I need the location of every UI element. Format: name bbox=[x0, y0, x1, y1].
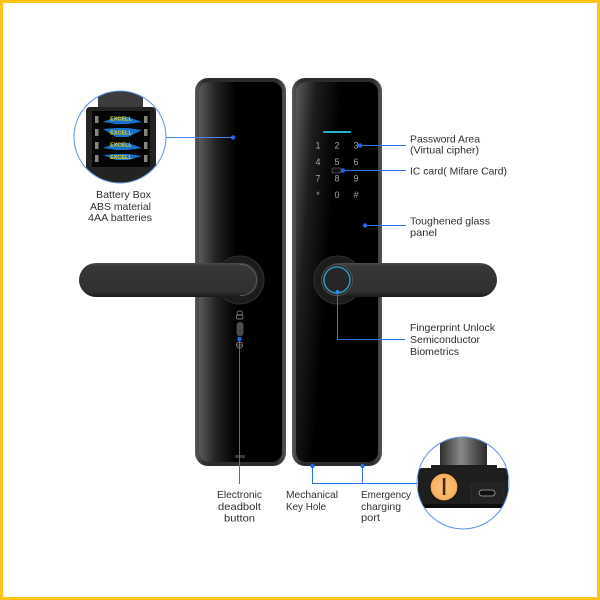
label: fingerprint bbox=[410, 322, 496, 358]
battery 1: EXCELL bbox=[110, 116, 132, 122]
callout line: IC card bbox=[341, 168, 406, 173]
right lock panel bbox=[292, 78, 382, 466]
label: deadbolt: button bbox=[224, 512, 255, 524]
callout line: toughened glass bbox=[363, 223, 406, 228]
fingerprint ring bbox=[324, 267, 350, 293]
keypad: 1 bbox=[315, 140, 321, 150]
label: deadbolt: Electronic bbox=[217, 489, 262, 501]
label: password area bbox=[410, 134, 480, 156]
keypad: * bbox=[316, 190, 320, 200]
keypad: # bbox=[353, 190, 359, 200]
label: battery box bbox=[88, 189, 152, 224]
label: deadbolt: deadbolt bbox=[218, 501, 261, 513]
label: emergency charging port bbox=[361, 489, 412, 524]
key cylinder bbox=[430, 473, 458, 501]
USB-C port bbox=[479, 490, 495, 496]
label: toughened glass bbox=[410, 216, 490, 239]
callout lines: key hole and charging port bbox=[310, 464, 417, 484]
bottom grille bbox=[235, 455, 245, 458]
label: emergency charging port: charging bbox=[361, 501, 401, 513]
battery 3: EXCELL bbox=[110, 142, 132, 148]
key and charging port inset bbox=[417, 436, 509, 529]
label: toughened glass: panel bbox=[410, 227, 437, 239]
label: battery box: ABS material bbox=[90, 201, 151, 213]
keypad: 8 bbox=[334, 174, 340, 184]
keypad: 5 bbox=[334, 157, 340, 167]
label: battery box: Battery Box bbox=[96, 189, 152, 201]
IC card reader icon bbox=[332, 168, 341, 173]
deadbolt button bbox=[236, 311, 244, 348]
callout line: password area bbox=[358, 143, 406, 148]
label: IC card: IC card( Mifare Card) bbox=[410, 166, 507, 178]
label: emergency charging port: Emergency bbox=[361, 489, 412, 501]
keypad: 4 bbox=[315, 157, 321, 167]
label: deadbolt bbox=[217, 489, 262, 524]
battery box inset bbox=[74, 90, 166, 183]
keypad: 6 bbox=[353, 157, 359, 167]
label: password area: Password Area bbox=[410, 134, 480, 146]
left handle bbox=[79, 256, 264, 304]
label: mechanical key hole: Key Hole bbox=[286, 501, 326, 513]
callout line: fingerprint bbox=[336, 290, 405, 340]
label: toughened glass: Toughened glass bbox=[410, 216, 490, 228]
label: mechanical key hole: Mechanical bbox=[286, 489, 338, 501]
keypad: 0 bbox=[334, 190, 340, 200]
callout line: deadbolt bbox=[237, 337, 242, 484]
label: battery box: 4AA batteries bbox=[88, 212, 152, 224]
label: emergency charging port: port bbox=[361, 512, 380, 524]
status light bar bbox=[323, 131, 351, 133]
battery 2: EXCELL bbox=[110, 130, 132, 136]
right handle with fingerprint sensor bbox=[314, 256, 497, 304]
left lock panel bbox=[195, 78, 286, 466]
label: fingerprint: Fingerprint Unlock bbox=[410, 322, 496, 334]
keypad: 2 bbox=[334, 140, 340, 150]
label: fingerprint: Semiconductor bbox=[410, 334, 480, 346]
keypad bbox=[315, 140, 359, 200]
keypad: 9 bbox=[353, 174, 359, 184]
label: mechanical key hole bbox=[286, 489, 338, 513]
label: password area: (Virtual cipher) bbox=[410, 144, 479, 156]
keypad: 7 bbox=[315, 174, 321, 184]
battery 4: EXCELL bbox=[110, 155, 132, 161]
callout line: battery box bbox=[166, 135, 235, 140]
label: fingerprint: Biometrics bbox=[410, 346, 459, 358]
keypad: 3 bbox=[353, 140, 359, 150]
